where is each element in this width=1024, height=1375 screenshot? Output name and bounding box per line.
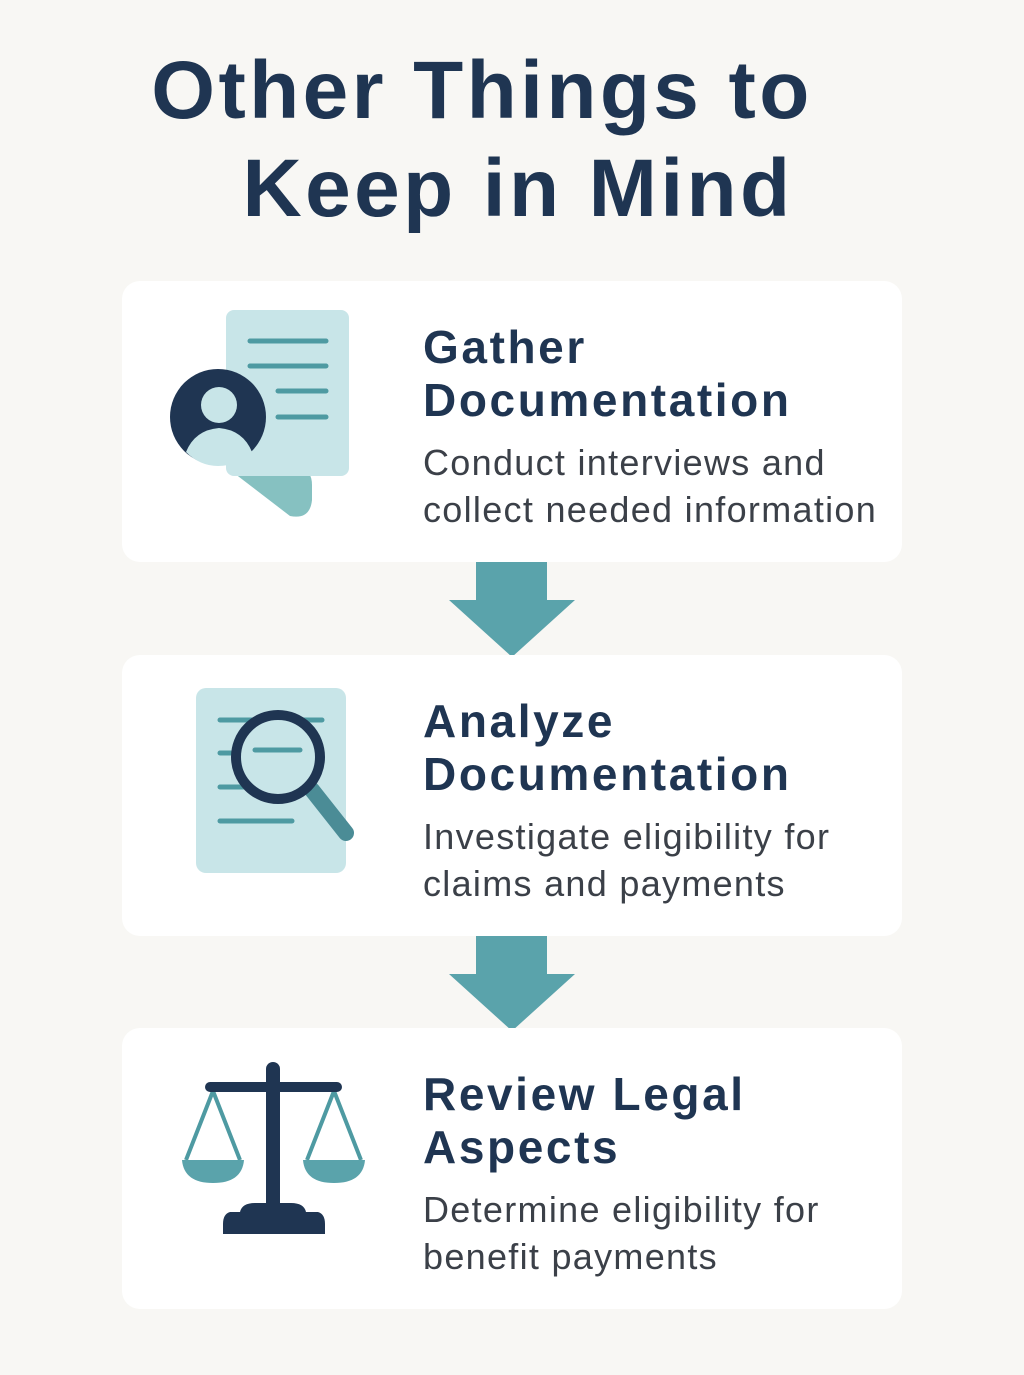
text xyxy=(423,1189,820,1277)
heading: Gather xyxy=(423,321,587,373)
heading: Aspects xyxy=(423,1121,620,1173)
text: benefit payments xyxy=(423,1236,718,1277)
title xyxy=(151,45,813,234)
arrow xyxy=(449,936,575,1028)
heading xyxy=(423,321,792,426)
heading: Documentation xyxy=(423,748,792,800)
text: Investigate eligibility for xyxy=(423,816,830,857)
icon: scales xyxy=(182,1062,365,1234)
icon: document with person xyxy=(170,310,349,517)
heading: Analyze xyxy=(423,695,615,747)
heading xyxy=(423,1068,746,1173)
panel: analyze documentation xyxy=(122,655,902,936)
title: Other Things to xyxy=(151,45,813,136)
text xyxy=(423,442,877,530)
arrow xyxy=(449,562,575,655)
heading xyxy=(423,695,792,800)
text: collect needed information xyxy=(423,489,877,530)
icon: document with magnifier xyxy=(196,688,354,873)
heading: Review Legal xyxy=(423,1068,746,1120)
text: Determine eligibility for xyxy=(423,1189,820,1230)
panel: gather documentation xyxy=(122,281,902,562)
text xyxy=(423,816,830,904)
text: claims and payments xyxy=(423,863,786,904)
panel: review legal aspects xyxy=(122,1028,902,1309)
heading: Documentation xyxy=(423,374,792,426)
text: Conduct interviews and xyxy=(423,442,826,483)
title: Keep in Mind xyxy=(242,143,794,234)
